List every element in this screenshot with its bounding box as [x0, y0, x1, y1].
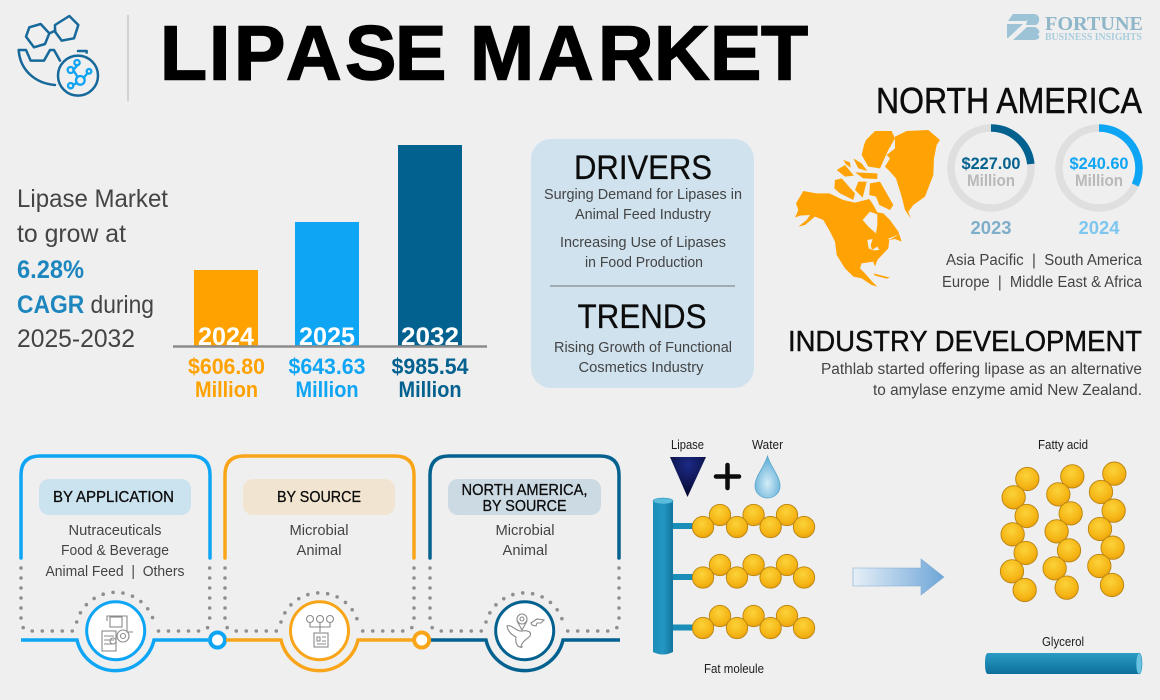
label: North America by source: BY SOURCE: [482, 498, 566, 515]
label: glycerol: Glycerol: [1042, 634, 1084, 649]
logo: Fortune Business Insights: BUSINESS INSIGHTS: [1045, 32, 1142, 43]
text block: industry development: Pathlab started offering lipase as an alternative: [821, 361, 1142, 378]
value: 2032: Million: [398, 377, 462, 402]
text block: industry development: to amylase enzyme amid New Zealand.: [873, 382, 1142, 399]
diagram: fat molecule: [653, 437, 815, 676]
list: applications: Animal Feed | Others: [46, 563, 184, 580]
list: North America sources: [496, 522, 554, 559]
chart: 2023 donut: [951, 128, 1031, 238]
bar chart: [173, 145, 487, 402]
panel: by application: [21, 456, 210, 671]
glycerol bar: [985, 653, 1142, 674]
chart: 2023 donut: Million: [967, 171, 1015, 190]
value: 2025: [288, 354, 366, 402]
icon: enzyme molecules: [19, 16, 98, 96]
value: 2032: $985.54: [392, 354, 469, 379]
fatty acid chains: [1000, 462, 1126, 602]
list: North America sources: Microbial: [496, 522, 554, 539]
icon: source: [306, 616, 334, 647]
label: by application: [39, 479, 191, 515]
title: LIPASE MARKET: [160, 10, 808, 96]
icon: lipase triangle: [670, 457, 706, 497]
text block: other regions: Asia Pacific | South America: [946, 252, 1142, 269]
arrow: [853, 559, 944, 595]
bar: 2024: [194, 270, 258, 351]
chart: 2023 donut: 2023: [970, 218, 1012, 238]
label: fat molecule: Fat moleule: [704, 661, 764, 676]
trends list: Rising Growth of Functional: [554, 340, 732, 356]
list: North America sources: Animal: [502, 542, 548, 559]
chart: 2024 donut: [1059, 128, 1139, 238]
label: North America by source: [448, 479, 601, 515]
heading: industry development: INDUSTRY DEVELOPMENT: [788, 326, 1142, 358]
label: North America by source: NORTH AMERICA,: [462, 482, 588, 499]
icon: plus: [716, 465, 739, 488]
label: by source: BY SOURCE: [277, 489, 361, 506]
value: 2025: Million: [296, 377, 358, 402]
trends list: [554, 340, 732, 376]
list: sources: Animal: [296, 542, 342, 559]
list: sources: Microbial: [290, 522, 348, 539]
chart: 2024 donut: 2024: [1078, 218, 1120, 238]
panel: by source: [225, 456, 414, 671]
diagram: products: [985, 437, 1142, 674]
list: applications: [46, 522, 184, 580]
trends list: Cosmetics Industry: [578, 360, 704, 376]
heading: drivers: DRIVERS: [574, 149, 712, 187]
value: 2024: [188, 354, 265, 402]
text block: CAGR statement: 2025-2032: [17, 325, 135, 353]
value: 2025: $643.63: [288, 354, 366, 379]
panel: North America by source: [430, 456, 620, 671]
separator: [127, 15, 129, 101]
text block: CAGR statement: [17, 185, 168, 353]
list: applications: Nutraceuticals: [68, 522, 162, 539]
drivers list: Increasing Use of Lipases: [560, 235, 726, 251]
drivers list: Surging Demand for Lipases in: [544, 187, 742, 203]
heading: trends: TRENDS: [578, 298, 706, 336]
icon: water drop: [755, 456, 780, 498]
text block: CAGR statement: Lipase Market: [17, 185, 168, 213]
logo: Fortune Business Insights: FORTUNE: [1045, 13, 1143, 35]
label: fatty acid: Fatty acid: [1038, 437, 1088, 452]
glycerol backbone: [653, 498, 695, 654]
icon: location map: [507, 614, 544, 648]
value: 2024: $606.80: [188, 354, 265, 379]
fatty chains: [692, 504, 815, 639]
panel: drivers and trends: [531, 139, 754, 388]
bar: 2032: [398, 145, 462, 351]
value: 2024: Million: [195, 377, 258, 402]
drivers list: in Food Production: [585, 255, 703, 271]
connector: orange: [414, 632, 429, 648]
label: lipase: Lipase: [671, 437, 704, 452]
value: 2032: [392, 354, 469, 402]
text block: other regions: Europe | Middle East & Africa: [942, 274, 1142, 291]
text block: CAGR statement: to grow at: [17, 220, 126, 248]
chart: 2024 donut: $240.60: [1070, 154, 1128, 173]
icon: application: [102, 616, 133, 651]
drivers list: [544, 187, 742, 271]
map: North America: [795, 130, 940, 287]
text block: other regions: [942, 252, 1142, 291]
text block: CAGR statement: 6.28%: [17, 256, 84, 284]
label: water: Water: [752, 437, 784, 452]
bar: 2025: [295, 222, 359, 351]
bar: 2032: 2032: [401, 323, 459, 351]
text block: industry development: [821, 361, 1142, 399]
text block: CAGR statement: CAGR during: [17, 291, 154, 319]
logo: Fortune Business Insights: [1007, 13, 1143, 43]
list: applications: Food & Beverage: [61, 542, 169, 559]
bar: 2025: 2025: [299, 323, 355, 351]
label: by source: [243, 479, 395, 515]
drivers list: Animal Feed Industry: [575, 207, 712, 223]
connector: blue: [210, 632, 225, 648]
bar: 2024: 2024: [198, 323, 254, 351]
chart: 2024 donut: Million: [1075, 171, 1123, 190]
chart: 2023 donut: $227.00: [962, 154, 1020, 173]
label: by application: BY APPLICATION: [53, 489, 174, 506]
list: sources: [290, 522, 348, 559]
